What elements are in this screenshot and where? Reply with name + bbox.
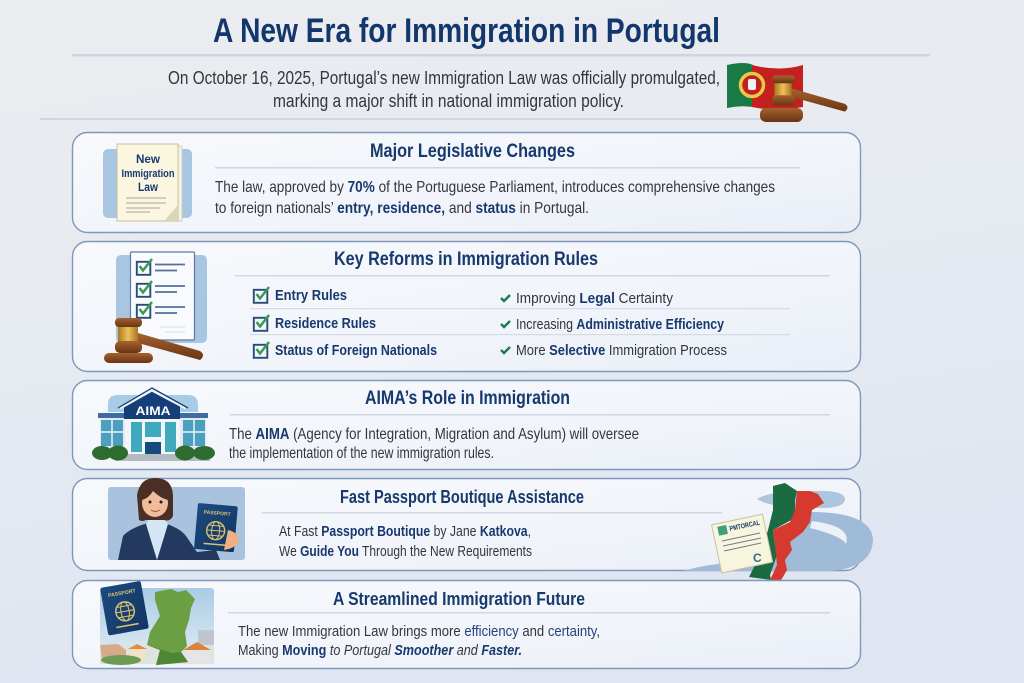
icon: advisor holding passport — [108, 478, 245, 560]
body text: Making Moving to Portugal Smoother and Faster. — [238, 642, 522, 659]
body text — [279, 523, 532, 560]
panel: AIMA's role — [72, 380, 860, 470]
body text: At Fast Passport Boutique by Jane Katkova, — [279, 523, 531, 540]
intro text: On October 16, 2025, Portugal’s new Immigration Law was officially promulgated, — [168, 68, 720, 88]
icon: AIMA building: AIMA — [136, 404, 171, 418]
icon: new immigration law document: Law — [138, 180, 159, 194]
body text — [238, 623, 600, 659]
list: rules: Entry Rules — [275, 287, 347, 304]
body text: the implementation of the new immigration rules. — [229, 445, 494, 462]
panel: streamlined future — [72, 580, 860, 668]
icon: AIMA building — [92, 388, 215, 461]
list: outcomes: Increasing Administrative Efficiency — [516, 316, 725, 333]
heading: Major Legislative Changes — [370, 141, 575, 162]
icon: new immigration law document: Immigration — [122, 168, 175, 180]
body text: The law, approved by 70% of the Portuguese Parliament, introduces comprehensive changes — [215, 179, 775, 196]
list: outcomes: More Selective Immigration Process — [516, 342, 727, 359]
illustration: Portugal map, road and certificate — [683, 483, 873, 582]
body text — [229, 426, 639, 462]
body text — [215, 179, 775, 217]
body text: The AIMA (Agency for Integration, Migration and Asylum) will oversee — [229, 426, 639, 443]
intro text: marking a major shift in national immigration policy. — [273, 91, 624, 111]
heading: A Streamlined Immigration Future — [333, 588, 585, 609]
icon: new immigration law document — [103, 144, 192, 221]
body text: The new Immigration Law brings more efficiency and certainty, — [238, 623, 600, 640]
list: outcomes: Improving Legal Certainty — [516, 290, 673, 307]
icon: new immigration law document: New — [136, 152, 161, 166]
illustration: Portugal map, road and certificate: C — [753, 551, 762, 565]
intro text — [168, 68, 720, 111]
body text: to foreign nationals’ entry, residence, and status in Portugal. — [215, 200, 589, 217]
icon: checklist with gavel — [104, 252, 207, 363]
body text: We Guide You Through the New Requirements — [279, 543, 532, 560]
heading: Fast Passport Boutique Assistance — [340, 486, 584, 507]
icon: Portuguese flag and gavel — [727, 63, 848, 122]
list: rules: Status of Foreign Nationals — [275, 342, 437, 359]
icon: passport and Portugal map — [100, 581, 214, 665]
list: outcomes — [501, 290, 727, 359]
illustration: Portugal map, road and certificate: PMTORCAL — [729, 520, 761, 533]
panel: major legislative changes — [72, 132, 860, 232]
panel: key reforms — [72, 242, 860, 372]
heading: AIMA’s Role in Immigration — [365, 388, 570, 409]
heading: Key Reforms in Immigration Rules — [334, 249, 598, 270]
title: A New Era for Immigration in Portugal — [213, 12, 720, 50]
panel: fast passport boutique — [72, 478, 873, 582]
list: rules — [254, 287, 437, 359]
list: rules: Residence Rules — [275, 315, 376, 332]
